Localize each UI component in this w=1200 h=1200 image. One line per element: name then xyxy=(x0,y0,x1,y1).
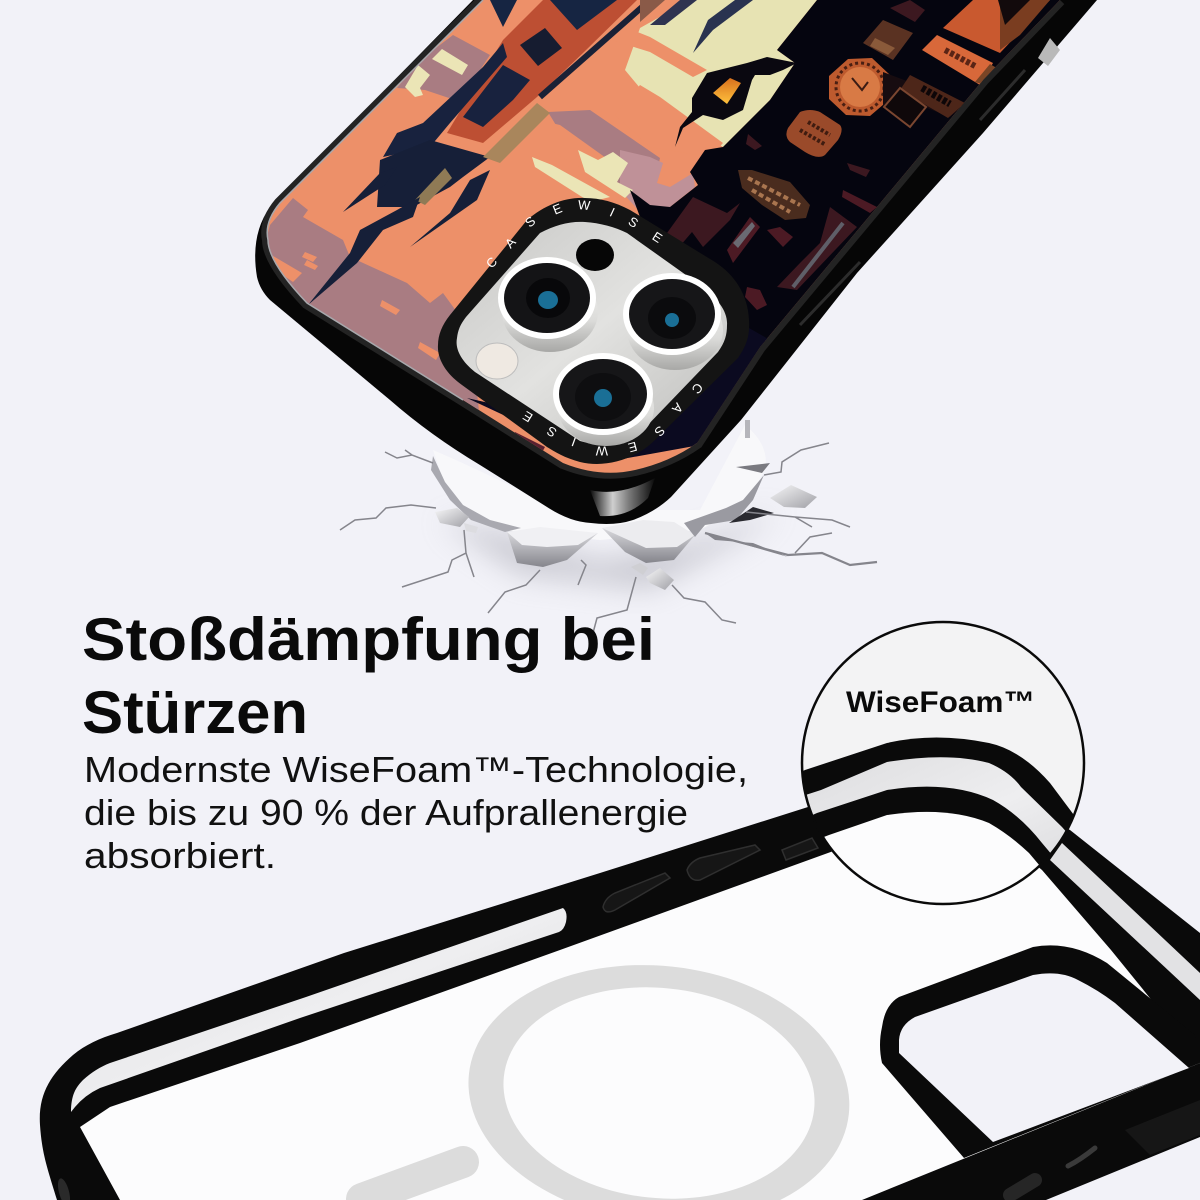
screen artwork xyxy=(268,0,1060,473)
magnified clear xyxy=(790,812,1090,950)
description: Modernste WiseFoam™-Technologie, xyxy=(84,749,748,790)
band sheen xyxy=(1125,1100,1200,1155)
bottom buttons xyxy=(1010,1180,1035,1195)
camera plate xyxy=(457,222,727,444)
tower arches xyxy=(520,28,562,66)
top post xyxy=(745,420,750,438)
spire right xyxy=(410,170,490,247)
title: Stürzen xyxy=(82,679,308,746)
magsafe ring xyxy=(456,947,862,1200)
soft shadows xyxy=(440,510,780,590)
painting base orange xyxy=(268,0,1060,473)
tower base xyxy=(377,140,490,207)
orange band over mauve xyxy=(555,124,604,160)
left slot xyxy=(56,1177,72,1200)
sign: brown boxes xyxy=(863,20,913,60)
top phone with case xyxy=(250,0,1100,524)
orange stripes xyxy=(633,32,707,77)
red pixel structures xyxy=(667,197,740,247)
magnified frame xyxy=(804,738,1074,865)
dark fissure xyxy=(729,507,774,523)
mauve right band xyxy=(548,110,660,184)
case body xyxy=(255,0,1097,524)
tower top triangle xyxy=(490,0,517,27)
crack lines xyxy=(340,443,850,633)
tower right edge xyxy=(540,0,650,97)
crater surface xyxy=(433,425,766,540)
left strip xyxy=(71,908,567,1112)
title xyxy=(82,606,655,746)
description: die bis zu 90 % der Aufprallenergie xyxy=(84,792,688,833)
CASEWISE text bottom: CASEWISE xyxy=(520,380,706,458)
callout outline xyxy=(802,622,1084,904)
tower window xyxy=(463,65,530,127)
screen edge highlight xyxy=(267,0,483,400)
sign: orange plate xyxy=(922,35,1000,85)
mauve lower band xyxy=(262,198,480,420)
magnified strip xyxy=(806,757,1066,853)
lens 3 xyxy=(553,353,654,446)
side buttons xyxy=(603,838,818,912)
cream blocks left xyxy=(405,49,468,97)
description: absorbiert. xyxy=(84,835,276,876)
large cream sky xyxy=(625,0,817,147)
dark wedge xyxy=(736,463,770,473)
camera island xyxy=(438,197,749,464)
long wedge xyxy=(705,533,788,557)
chunk: center right xyxy=(602,520,695,563)
title: Stoßdämpfung bei xyxy=(82,606,655,673)
chunk: tiny bottom xyxy=(631,563,648,575)
clock sign xyxy=(829,58,891,116)
case gloss xyxy=(590,478,655,516)
side button line xyxy=(800,70,1025,325)
tower left flank xyxy=(383,43,507,157)
tower red body xyxy=(447,0,637,143)
clear interior xyxy=(80,845,1200,1200)
dark building xyxy=(620,0,1070,470)
left rim xyxy=(431,456,521,532)
sign: scroll xyxy=(738,170,810,220)
sign: top right orange xyxy=(943,0,1050,53)
lens 2 xyxy=(623,273,723,370)
bottom clear case xyxy=(40,765,1200,1200)
chunk: center left xyxy=(507,527,598,567)
side button highlight xyxy=(1038,38,1060,66)
mauve stepped xyxy=(620,150,695,212)
callout label: WiseFoam™ xyxy=(846,686,1035,719)
inner rim xyxy=(267,0,1060,473)
cream blocks middle xyxy=(578,150,633,198)
sign: dark plate xyxy=(883,72,965,127)
description xyxy=(84,749,748,876)
orange pixels xyxy=(268,252,440,360)
flash xyxy=(476,343,518,379)
mauve upper band xyxy=(397,35,490,100)
microphone hole xyxy=(576,239,614,271)
callout magnifier xyxy=(800,620,1086,906)
cracked surface impact xyxy=(340,420,877,633)
magsafe pill xyxy=(362,1162,463,1199)
frame outer xyxy=(40,765,1200,1200)
right rim xyxy=(684,475,764,537)
spire left xyxy=(343,174,380,212)
sign: rounded tag xyxy=(786,110,842,157)
lens 1 xyxy=(498,257,598,352)
lamp xyxy=(675,57,797,147)
central spire xyxy=(308,197,420,305)
bottom dark strip xyxy=(467,328,767,458)
CASEWISE text top: CASEWISE xyxy=(483,197,665,271)
hanging spires xyxy=(693,0,753,53)
chunk: small left xyxy=(435,508,469,527)
chunk: small right xyxy=(770,485,817,508)
right strip xyxy=(1050,843,1200,1000)
tower lattice xyxy=(483,103,550,163)
camera cutout xyxy=(880,945,1200,1158)
